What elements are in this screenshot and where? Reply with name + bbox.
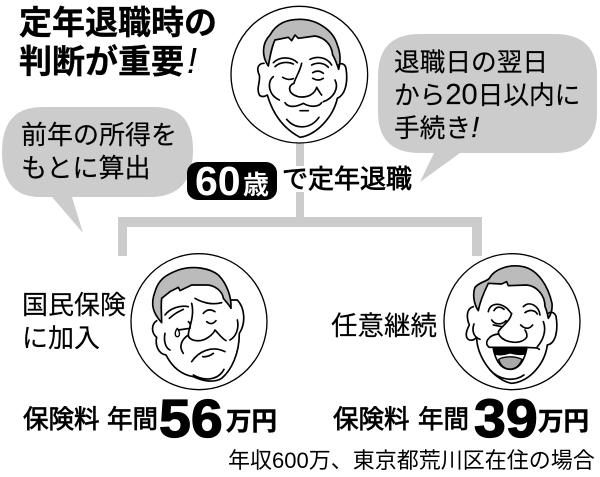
connector tree [118, 143, 482, 256]
left bubble text: 前年の所得を [21, 120, 177, 150]
face: crying [131, 254, 267, 390]
right bubble text: 手続き! [394, 112, 479, 144]
bubble: right [378, 34, 597, 182]
premium left: 年間 [107, 406, 158, 434]
premium left [23, 389, 277, 449]
bubble: left [2, 107, 193, 233]
premium right: 39 [474, 389, 538, 449]
option label: national insurance [22, 290, 126, 353]
premium left: 保険料 [23, 406, 100, 434]
badge: 60 years old: 60 [195, 158, 241, 204]
premium right [333, 389, 589, 449]
premium left: 56 [159, 389, 223, 449]
title: 定年退職時の [19, 4, 217, 41]
badge: 60 years old: 歳 [243, 170, 269, 200]
source note: 年収600万、東京都荒川区在住の場合 [228, 448, 595, 473]
title: 判断が重要! [19, 40, 197, 81]
premium right: 年間 [418, 406, 469, 434]
retirement label: で定年退職 [282, 164, 412, 194]
left bubble text: もとに算出 [21, 153, 150, 183]
badge: 60 years old [187, 162, 277, 200]
title [19, 4, 217, 81]
face: neutral [231, 6, 368, 143]
premium right: 万円 [538, 408, 589, 436]
right bubble text: 退職日の翌日 [394, 49, 548, 77]
right bubble text [394, 49, 580, 144]
option label: national insurance: に加入 [22, 323, 100, 353]
premium left: 万円 [226, 408, 277, 436]
right bubble text: から20日以内に [394, 79, 580, 111]
face: laughing [444, 254, 580, 390]
premium right: 保険料 [333, 406, 410, 434]
left bubble text [21, 120, 177, 183]
option label: national insurance: 国民保険 [22, 290, 126, 320]
option label: voluntary continuation: 任意継続 [331, 311, 437, 341]
